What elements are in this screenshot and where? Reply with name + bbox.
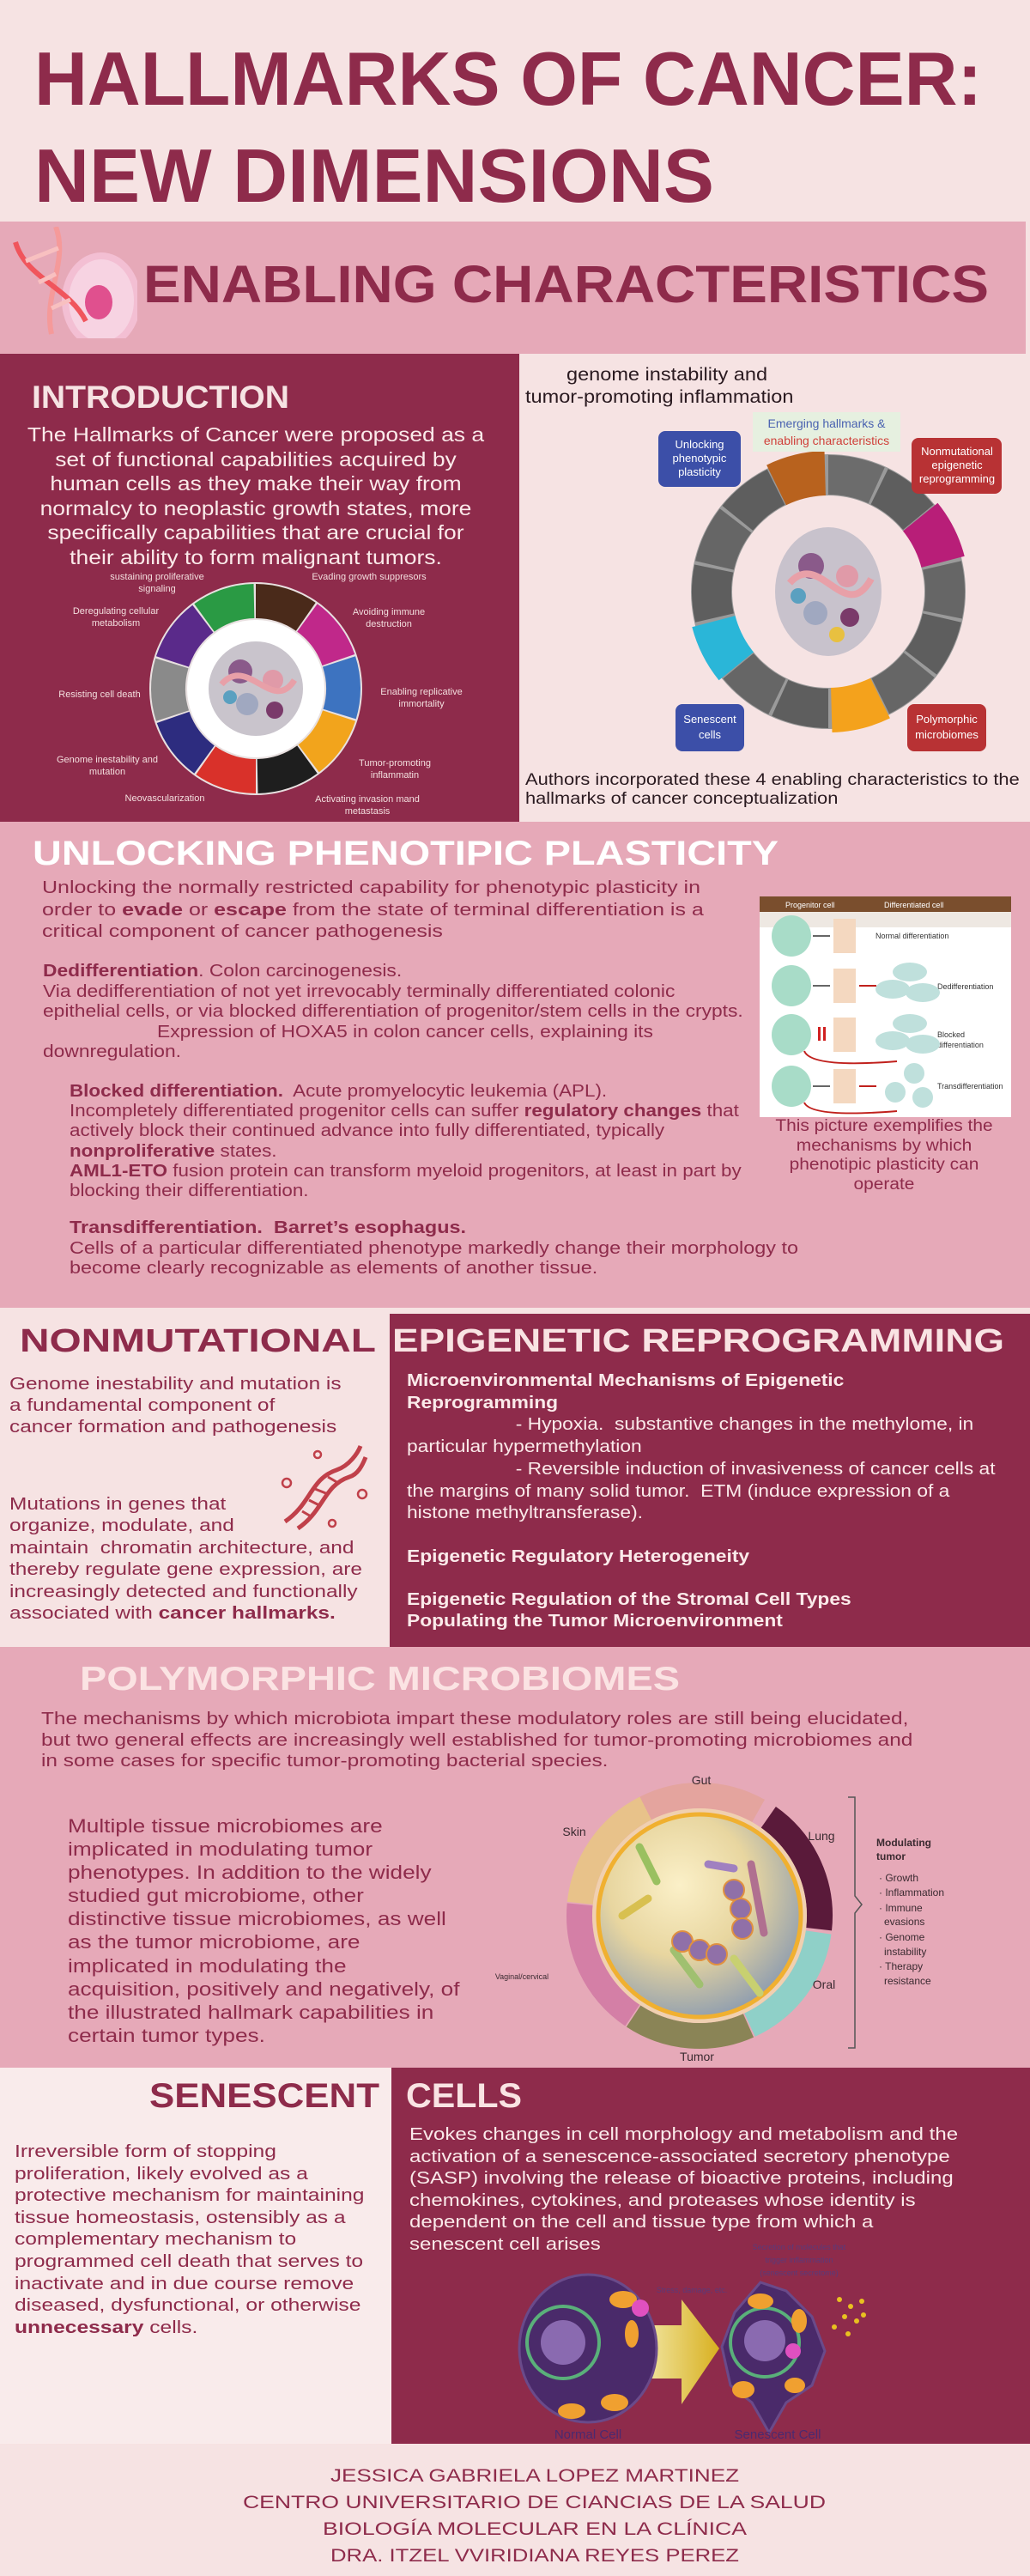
- text: mechanisms microbiota: [41, 1710, 912, 1771]
- text: epigenetic mechanisms: Microenvironmental Mechanisms of Epigenetic: [407, 1371, 844, 1390]
- text: evokes changes: [409, 2125, 958, 2253]
- text: multiple tissue microbiomes: Multiple tissue microbiomes are: [68, 1815, 383, 1837]
- illustration: normal to senescent cell: Stress, damage, etc.: [657, 2286, 727, 2294]
- text: evokes changes: dependent on the cell and tissue type from which a: [409, 2213, 873, 2232]
- footer: credits: JESSICA GABRIELA LOPEZ MARTINEZ: [330, 2466, 739, 2486]
- text: epigenetic mechanisms: - Reversible induction of invasiveness of cancer cells at: [516, 1460, 996, 1479]
- chart: microbiome circle: resistance: [884, 1975, 931, 1987]
- label: nonmutational epigenetic reprogramming: reprogramming: [919, 472, 995, 485]
- text: mutations in genes: [9, 1495, 362, 1623]
- image: differentiation diagram: Progenitor cell: [785, 901, 835, 909]
- panel: introduction: [0, 354, 519, 822]
- text: mechanisms microbiota: in some cases for specific tumor-promoting bacterial species.: [41, 1752, 608, 1771]
- illustration: normal to senescent cell: (senescent secretome): [760, 2269, 839, 2277]
- footer: credits: CENTRO UNIVERSITARIO DE CIANCIAS DE LA SALUD: [243, 2493, 826, 2512]
- text: multiple tissue microbiomes: distinctive tissue microbiomes, as well: [68, 1908, 446, 1929]
- chart: hallmarks wheel: mutation: [89, 767, 125, 777]
- text: dedifferentiation: downregulation.: [43, 1042, 181, 1061]
- chart: microbiome circle: Lung: [808, 1829, 835, 1843]
- text: epigenetic mechanisms: histone methyltransferase).: [407, 1504, 643, 1522]
- icon: dna: [282, 1445, 367, 1530]
- text: blocked differentiation: AML1-ETO fusion protein can transform myeloid progenitors, at least in part by: [70, 1162, 742, 1181]
- chart: hallmarks wheel: destruction: [366, 619, 412, 629]
- text: intro paragraph: [27, 423, 484, 568]
- text: mutations in genes: increasingly detected and functionally: [9, 1583, 358, 1601]
- text: epigenetic mechanisms: Reprogramming: [407, 1394, 558, 1413]
- chart: microbiome circle: Modulating: [876, 1837, 931, 1849]
- text: intro plasticity: Unlocking the normally restricted capability for phenotypic plasticity in: [42, 878, 700, 897]
- text: dedifferentiation: Dedifferentiation. Colon carcinogenesis.: [43, 962, 402, 981]
- text: epigenetic mechanisms: the margins of many solid tumor. ETM (induce expression of a: [407, 1482, 949, 1501]
- chart: hallmarks wheel: Deregulating cellular: [73, 606, 159, 617]
- image: differentiation diagram: Differentiated cell: [884, 901, 943, 909]
- text: regulatory heterogeneity: Epigenetic Regulatory Heterogeneity: [407, 1547, 749, 1566]
- text: genome instability: Genome inestability and mutation is: [9, 1375, 342, 1394]
- heading: introduction: INTRODUCTION: [32, 380, 289, 414]
- text: irreversible form: diseased, dysfunctional, or otherwise: [15, 2296, 360, 2315]
- text: dedifferentiation: [43, 962, 743, 1061]
- text: mechanisms microbiota: but two general effects are increasingly well established for tumor-promoting microbiomes and: [41, 1731, 912, 1750]
- text: multiple tissue microbiomes: phenotypes. In addition to the widely: [68, 1862, 432, 1883]
- text: evokes changes: activation of a senescence-associated secretory phenotype: [409, 2147, 950, 2166]
- text: multiple tissue microbiomes: [68, 1815, 460, 2046]
- chart: hallmarks wheel: metabolism: [92, 618, 140, 629]
- chart: microbiome circle: · Inflammation: [879, 1886, 944, 1899]
- text: multiple tissue microbiomes: as the tumor microbiome, are: [68, 1931, 360, 1953]
- chart: hallmarks wheel: Enabling replicative: [380, 687, 463, 697]
- text: blocked differentiation: actively block their continued advance into fully differentiated, typically: [70, 1121, 664, 1140]
- text: multiple tissue microbiomes: implicated in modulating tumor: [68, 1838, 373, 1860]
- text: stromal cell types: Epigenetic Regulation of the Stromal Cell Types: [407, 1590, 851, 1609]
- panel: unlocking phenotypic plasticity: [0, 822, 1030, 1308]
- label: polymorphic microbiomes: microbiomes: [915, 728, 978, 741]
- chart: microbiome circle: Gut: [692, 1773, 711, 1787]
- chart: microbiome circle: Vaginal/cervical: [495, 1972, 548, 1981]
- text: irreversible form: tissue homeostasis, ostensibly as a: [15, 2208, 346, 2227]
- chart: microbiome circle: evasions: [884, 1916, 924, 1928]
- title: HALLMARKS OF CANCER:: [34, 36, 982, 121]
- label: nonmutational epigenetic reprogramming: epigenetic: [931, 459, 983, 471]
- text: irreversible form: programmed cell death that serves to: [15, 2252, 363, 2271]
- text: dedifferentiation: epithelial cells, or via blocked differentiation of progenitor/stem cells in the crypts.: [43, 1002, 743, 1021]
- chart: microbiome circle: · Genome: [879, 1931, 925, 1943]
- title: [34, 36, 982, 218]
- text: evokes changes: Evokes changes in cell morphology and metabolism and the: [409, 2125, 958, 2144]
- text: blocked differentiation: blocking their differentiation.: [70, 1182, 309, 1200]
- text: intro plasticity: order to evade or escape from the state of terminal differentiation is a: [42, 900, 704, 919]
- label: polymorphic microbiomes: Polymorphic: [916, 713, 978, 726]
- text: blocked differentiation: nonproliferative states.: [70, 1142, 276, 1161]
- text: mutations in genes: thereby regulate gene expression, are: [9, 1560, 362, 1579]
- text: genome instability: [9, 1375, 342, 1437]
- text: intro paragraph: human cells as they make their way from: [50, 472, 462, 495]
- text: irreversible form: proliferation, likely evolved as a: [15, 2165, 308, 2184]
- text: stromal cell types: Populating the Tumor Microenvironment: [407, 1612, 783, 1631]
- text: picture caption: This picture exemplifies the: [775, 1117, 993, 1135]
- text: intro paragraph: normalcy to neoplastic growth states, more: [40, 497, 471, 519]
- heading: nonmutational epigenetic reprogramming: [20, 1323, 1004, 1357]
- image: differentiation diagram: [760, 896, 1011, 1117]
- text: irreversible form: protective mechanism for maintaining: [15, 2186, 364, 2205]
- illustration: normal to senescent cell: [518, 2243, 866, 2442]
- text: genome instability: a fundamental component of: [9, 1396, 275, 1415]
- text: irreversible form: [15, 2142, 364, 2337]
- text: transdifferentiation: become clearly recognizable as elements of another tissue.: [70, 1259, 597, 1278]
- text: authors incorporated: [525, 771, 1020, 808]
- image: differentiation diagram: Blocked: [937, 1030, 965, 1039]
- text: mutations in genes: maintain chromatin architecture, and: [9, 1539, 354, 1558]
- text: evokes changes: chemokines, cytokines, and proteases whose identity is: [409, 2191, 916, 2210]
- text: blocked differentiation: Incompletely differentiated progenitor cells can suffer regulatory changes that: [70, 1102, 739, 1121]
- text: picture caption: mechanisms by which: [797, 1137, 972, 1154]
- text: multiple tissue microbiomes: acquisition, positively and negatively, of: [68, 1978, 459, 2000]
- chart: emerging hallmarks wheel: [658, 412, 1002, 751]
- text: intro paragraph: set of functional capabilities acquired by: [55, 448, 457, 471]
- panel: senescent right: [391, 2068, 1030, 2444]
- text: stromal cell types: [407, 1590, 851, 1631]
- label: unlocking phenotypic plasticity: [658, 431, 741, 487]
- label: nonmutational epigenetic reprogramming: Nonmutational: [921, 445, 993, 458]
- text: blocked differentiation: Blocked differentiation. Acute promyelocytic leukemia (APL).: [70, 1082, 607, 1101]
- footer: credits: DRA. ITZEL VVIRIDIANA REYES PEREZ: [330, 2546, 739, 2566]
- text: evokes changes: (SASP) involving the release of bioactive proteins, including: [409, 2169, 954, 2188]
- text: picture caption: operate: [854, 1175, 914, 1194]
- panel: emerging hallmarks: [519, 354, 1030, 822]
- icon: dna and cell: [13, 227, 137, 338]
- chart: microbiome circle: Oral: [813, 1978, 835, 1991]
- panel: polymorphic microbiomes: [0, 1647, 1030, 2068]
- illustration: normal to senescent cell: Secretion of molecules that: [753, 2243, 846, 2251]
- text: irreversible form: inactivate and in due course remove: [15, 2275, 354, 2293]
- text: mutations in genes: Mutations in genes that: [9, 1495, 226, 1514]
- text: intro paragraph: specifically capabilities that are crucial for: [47, 521, 464, 544]
- text: mutations in genes: associated with cancer hallmarks.: [9, 1604, 336, 1623]
- text: blocked differentiation: [70, 1082, 742, 1200]
- label: emerging hallmarks: [753, 412, 900, 452]
- chart: microbiome circle: · Growth: [879, 1872, 918, 1884]
- text: multiple tissue microbiomes: studied gut microbiome, other: [68, 1885, 364, 1906]
- heading: senescent cells: [149, 2078, 522, 2112]
- chart: hallmarks wheel: Neovascularization: [125, 793, 204, 804]
- text: mutations in genes: organize, modulate, and: [9, 1516, 234, 1535]
- text: irreversible form: Irreversible form of stopping: [15, 2142, 276, 2161]
- text: irreversible form: complementary mechanism to: [15, 2230, 296, 2249]
- panel: emerging hallmarks: tumor-promoting inflammation: [525, 387, 793, 407]
- text: epigenetic mechanisms: - Hypoxia. substantive changes in the methylome, in: [516, 1415, 973, 1434]
- header background: [0, 0, 1030, 222]
- panel: senescent left: [0, 2068, 391, 2444]
- chart: hallmarks wheel: Tumor-promoting: [359, 758, 431, 769]
- chart: hallmarks wheel: Genome inestability and: [57, 755, 158, 765]
- chart: microbiome circle: · Immune: [879, 1902, 923, 1914]
- label: senescent cells: cells: [699, 728, 721, 741]
- label: emerging hallmarks: enabling characteristics: [764, 434, 889, 447]
- chart: hallmarks wheel: signaling: [138, 584, 176, 594]
- chart: hallmarks wheel: [57, 572, 463, 817]
- footer: credits: [243, 2466, 826, 2566]
- label: senescent cells: Senescent: [683, 713, 736, 726]
- chart: microbiome circle: tumor: [876, 1850, 906, 1862]
- chart: microbiome circle: Tumor: [680, 2050, 714, 2063]
- panel: nonmutational right: [390, 1314, 1030, 1647]
- text: evokes changes: senescent cell arises: [409, 2234, 601, 2253]
- text: picture caption: phenotipic plasticity can: [790, 1156, 978, 1174]
- label: nonmutational epigenetic reprogramming: [912, 438, 1002, 494]
- text: epigenetic mechanisms: [407, 1371, 996, 1522]
- chart: microbiome circle: [495, 1773, 944, 2063]
- text: transdifferentiation: Cells of a particular differentiated phenotype markedly change their morphology to: [70, 1238, 798, 1257]
- chart: microbiome circle: instability: [884, 1946, 926, 1958]
- text: genome instability: cancer formation and pathogenesis: [9, 1418, 336, 1437]
- footer: credits: BIOLOGÍA MOLECULAR EN LA CLÍNICA: [323, 2519, 747, 2539]
- text: mechanisms microbiota: The mechanisms by which microbiota impart these modulatory roles are still being elucidated,: [41, 1710, 908, 1728]
- text: intro paragraph: their ability to form malignant tumors.: [70, 546, 442, 568]
- label: senescent cells: [676, 704, 744, 751]
- text: multiple tissue microbiomes: certain tumor types.: [68, 2025, 265, 2046]
- text: epigenetic mechanisms: particular hypermethylation: [407, 1437, 642, 1456]
- text: transdifferentiation: [70, 1218, 798, 1278]
- text: genome instability caption: genome instability and: [566, 365, 767, 385]
- text: transdifferentiation: Transdifferentiation. Barret’s esophagus.: [70, 1218, 466, 1237]
- label: unlocking phenotypic plasticity: Unlocking: [675, 438, 724, 451]
- banner: enabling characteristics: [0, 222, 1026, 354]
- panel: nonmutational left: [0, 1314, 390, 1647]
- text: picture caption: [775, 1117, 993, 1194]
- title: NEW DIMENSIONS: [34, 133, 714, 218]
- label: polymorphic microbiomes: [907, 704, 986, 751]
- text: multiple tissue microbiomes: the illustrated hallmark capabilities in: [68, 2002, 433, 2023]
- illustration: normal to senescent cell: Senescent Cell: [735, 2427, 821, 2442]
- text: intro plasticity: critical component of cancer pathogenesis: [42, 922, 443, 941]
- chart: hallmarks wheel: inflammatin: [371, 770, 419, 781]
- image: differentiation diagram: differentiation: [937, 1041, 984, 1049]
- chart: hallmarks wheel: Activating invasion mand: [315, 794, 420, 805]
- chart: hallmarks wheel: Avoiding immune: [353, 607, 425, 617]
- label: emerging hallmarks: Emerging hallmarks &: [768, 416, 886, 430]
- chart: hallmarks wheel: Resisting cell death: [58, 690, 141, 700]
- text: intro plasticity: [42, 878, 704, 941]
- label: unlocking phenotypic plasticity: plasticity: [678, 465, 721, 478]
- chart: hallmarks wheel: sustaining proliferative: [110, 572, 204, 582]
- text: authors incorporated: hallmarks of cancer conceptualization: [525, 790, 838, 808]
- image: differentiation diagram: Transdifferentiation: [937, 1082, 1003, 1091]
- text: multiple tissue microbiomes: implicated in modulating the: [68, 1955, 347, 1977]
- text: irreversible form: unnecessary cells.: [15, 2318, 197, 2337]
- chart: microbiome circle: · Therapy: [879, 1960, 923, 1972]
- chart: hallmarks wheel: Evading growth suppresors: [312, 572, 427, 582]
- label: unlocking phenotypic plasticity: phenotypic: [673, 452, 727, 465]
- chart: microbiome circle: Skin: [562, 1825, 586, 1838]
- image: differentiation diagram: Dedifferentiation: [937, 982, 993, 991]
- text: dedifferentiation: Via dedifferentiation of not yet irrevocably terminally differentiated colonic: [43, 982, 675, 1001]
- chart: hallmarks wheel: metastasis: [345, 806, 391, 817]
- image: differentiation diagram: Normal differentiation: [876, 932, 948, 940]
- text: authors incorporated: Authors incorporated these 4 enabling characteristics to the: [525, 771, 1020, 789]
- chart: hallmarks wheel: immortality: [398, 699, 445, 709]
- heading: enabling characteristics: ENABLING CHARACTERISTICS: [143, 256, 989, 313]
- illustration: normal to senescent cell: Normal Cell: [554, 2427, 621, 2442]
- text: dedifferentiation: Expression of HOXA5 in colon cancer cells, explaining its: [157, 1023, 653, 1042]
- text: intro paragraph: The Hallmarks of Cancer were proposed as a: [27, 423, 484, 446]
- illustration: normal to senescent cell: trigger inflammation: [765, 2256, 833, 2264]
